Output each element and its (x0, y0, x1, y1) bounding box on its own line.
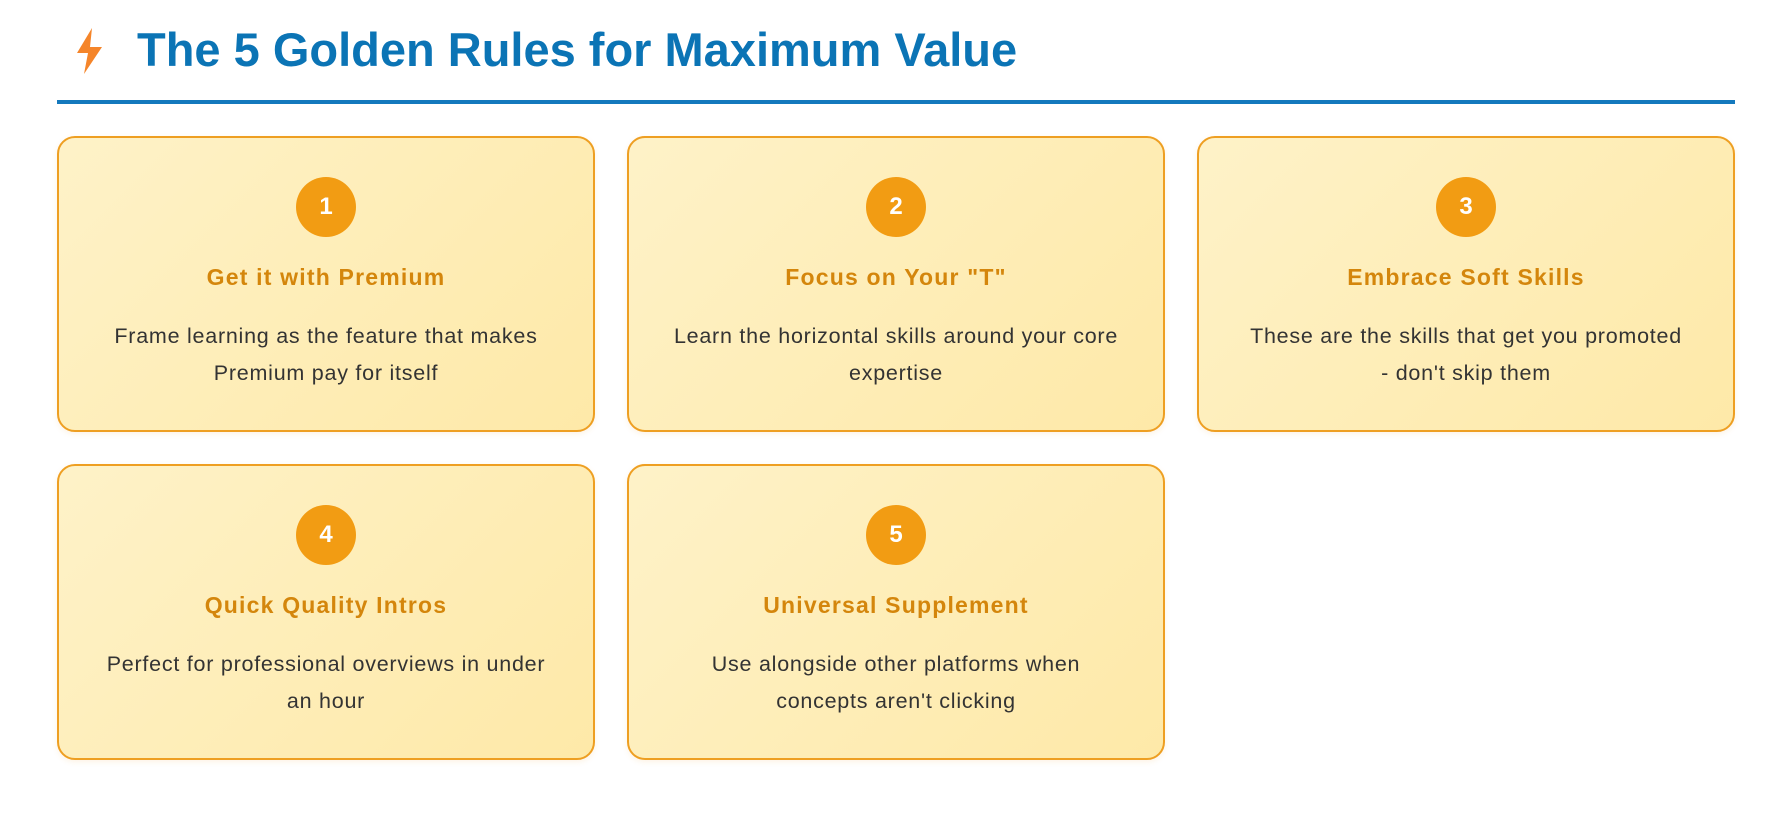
body 4: Perfect for professional overviews in under (107, 652, 545, 676)
body 3 (1250, 324, 1682, 385)
badge 5: 5 (889, 521, 903, 548)
badge 2: 2 (889, 193, 903, 220)
title: The 5 Golden Rules for Maximum Value (137, 23, 1017, 76)
body 5: Use alongside other platforms when (712, 652, 1080, 676)
body 5 (712, 652, 1080, 713)
heading 3: Embrace Soft Skills (1347, 264, 1585, 290)
body 1 (114, 324, 538, 385)
body 4: an hour (287, 689, 365, 713)
card: rule 2 (627, 136, 1165, 432)
heading 5: Universal Supplement (763, 592, 1029, 618)
body 2: expertise (849, 361, 943, 385)
body 1: Premium pay for itself (214, 361, 438, 385)
body 2 (674, 324, 1118, 385)
badge 2 (866, 177, 926, 237)
body 3: These are the skills that get you promoted (1250, 324, 1682, 348)
card: rule 5 (627, 464, 1165, 760)
body 3: - don't skip them (1381, 361, 1551, 385)
badge 3 (1436, 177, 1496, 237)
card: rule 4 (57, 464, 595, 760)
heading 1: Get it with Premium (207, 264, 445, 290)
card: rule 1 (57, 136, 595, 432)
badge 1: 1 (319, 193, 333, 220)
badge 1 (296, 177, 356, 237)
body 2: Learn the horizontal skills around your core (674, 324, 1118, 348)
badge 4 (296, 505, 356, 565)
heading 2: Focus on Your "T" (785, 264, 1007, 290)
heading 4: Quick Quality Intros (205, 592, 447, 618)
badge 3: 3 (1459, 193, 1473, 220)
badge 4: 4 (319, 521, 333, 548)
body 5: concepts aren't clicking (776, 689, 1016, 713)
badge 5 (866, 505, 926, 565)
body 1: Frame learning as the feature that makes (114, 324, 538, 348)
card: rule 3 (1197, 136, 1735, 432)
body 4 (107, 652, 545, 713)
icon: lightning bolt (77, 28, 102, 74)
